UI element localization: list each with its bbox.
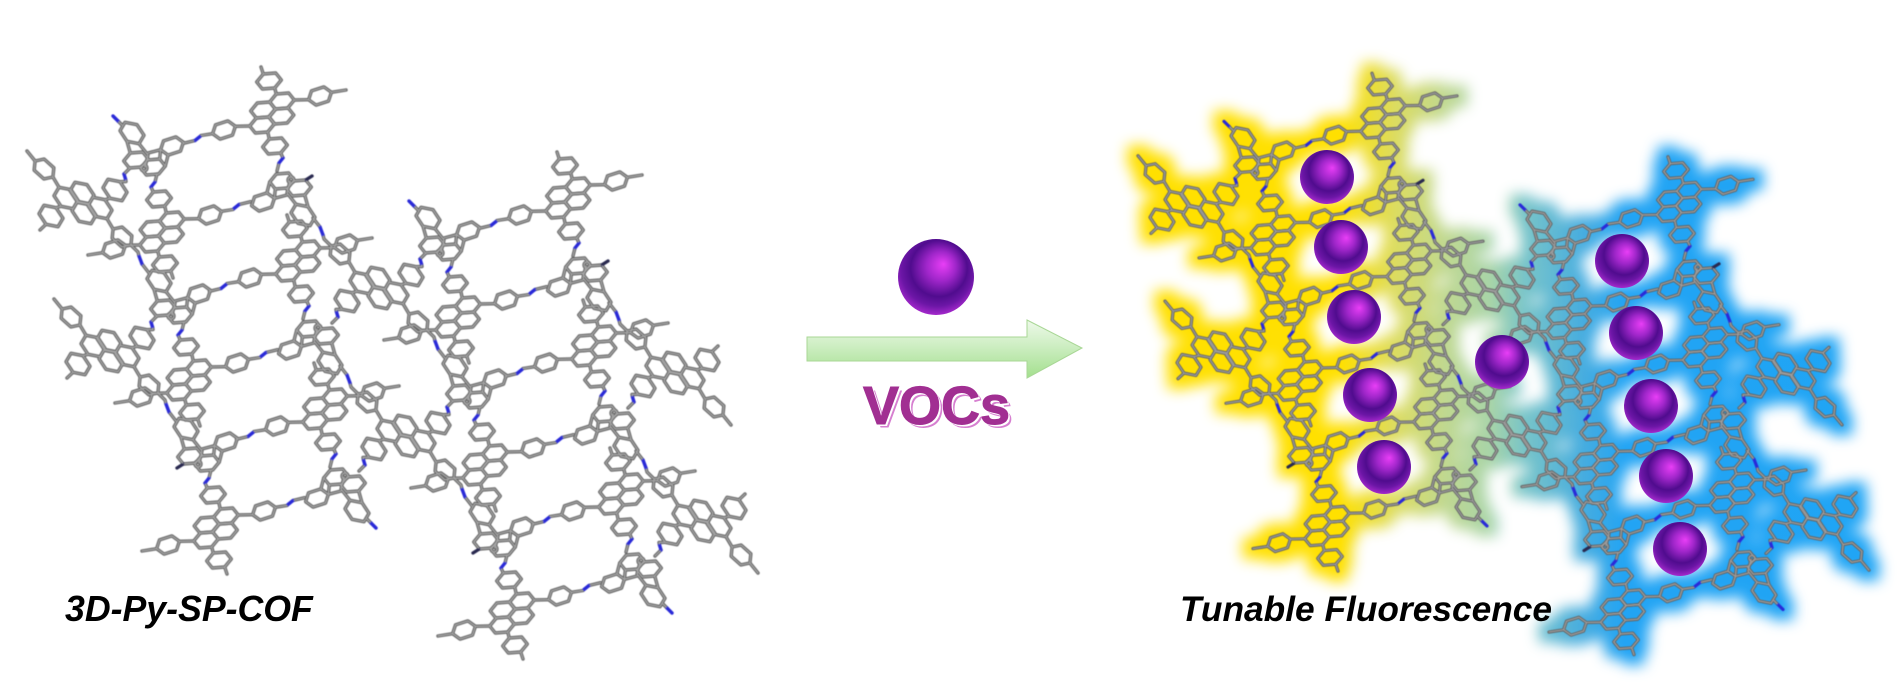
right framework with guests: [1138, 73, 1869, 655]
label: Tunable Fluorescence: Tunable Fluorescence: [1180, 590, 1552, 629]
label: VOCs: VOCs: [863, 376, 1010, 436]
icon: VOC sphere: [898, 239, 974, 315]
fluorescence glow: yellow to blue: [1116, 52, 1891, 676]
VOC guest spheres in pores: [1300, 150, 1707, 576]
arrow: [807, 320, 1082, 378]
label: 3D-Py-SP-COF: 3D-Py-SP-COF: [65, 589, 314, 629]
left framework: 3D-Py-SP-COF: [27, 67, 758, 659]
reaction arrow with VOC sphere: [807, 239, 1082, 378]
